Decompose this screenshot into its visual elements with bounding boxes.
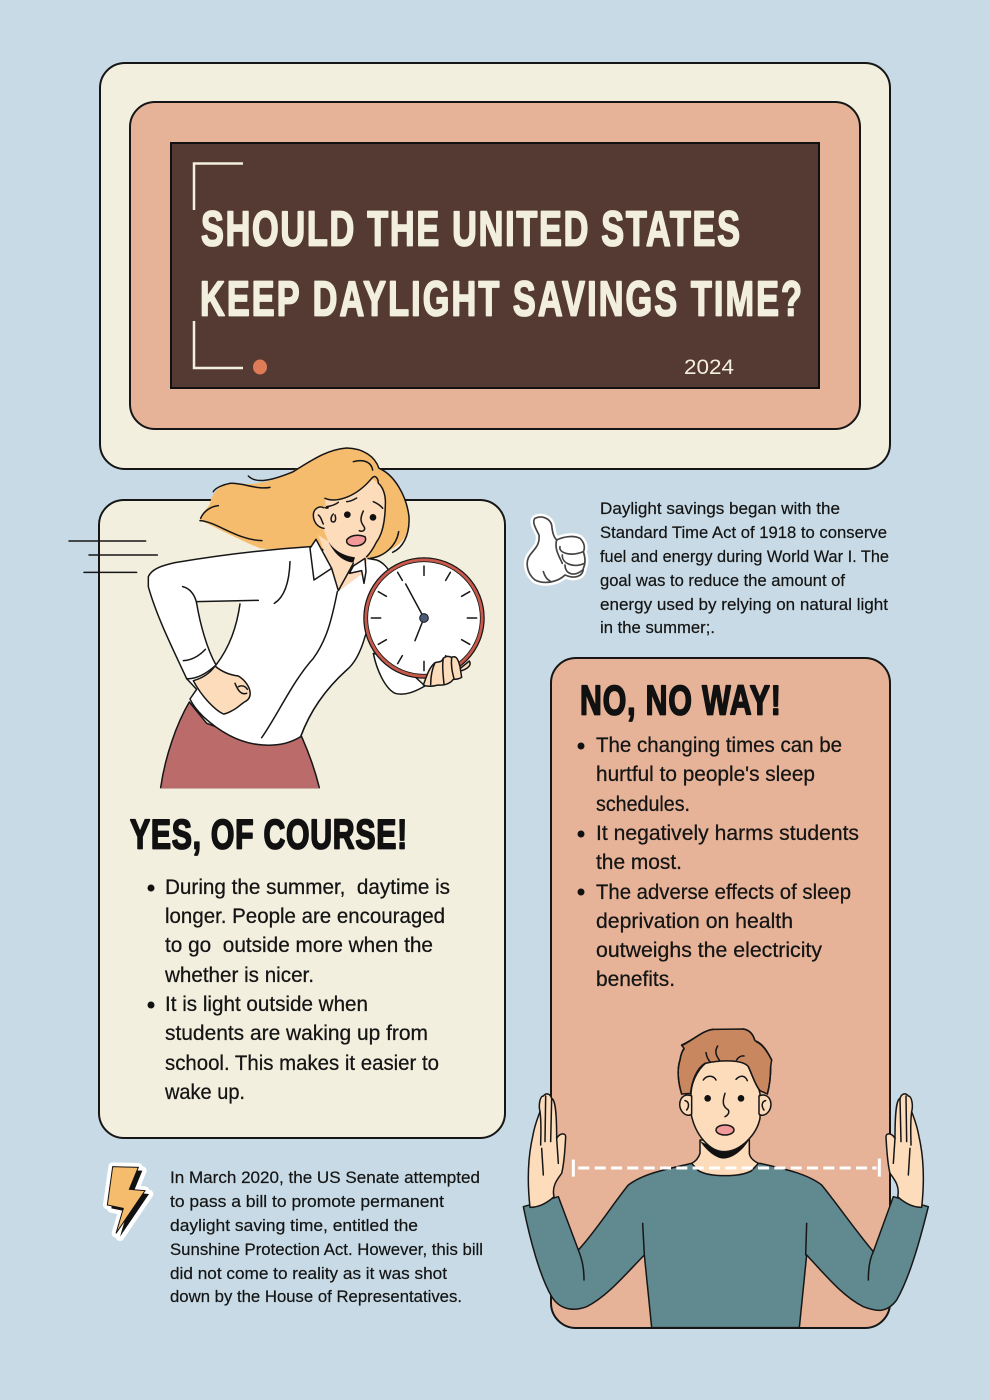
panel: yes [99, 500, 505, 1138]
text: senate note: to pass a bill to promote permanent [170, 1192, 444, 1211]
man sweater [523, 1163, 928, 1328]
list: no arguments: schedules. [596, 793, 690, 816]
list: yes arguments [148, 876, 450, 1104]
woman skirt [161, 702, 319, 788]
man hair [678, 1029, 772, 1094]
list: no arguments: deprivation on health [596, 910, 793, 933]
title [200, 201, 802, 326]
clock [364, 558, 484, 678]
text: history note: Standard Time Act of 1918 to conserve [600, 523, 887, 542]
list: yes arguments: It is light outside when [165, 993, 368, 1016]
text: senate note: Sunshine Protection Act. However, this bill [170, 1240, 483, 1259]
list: no arguments: The adverse effects of sleep [596, 881, 851, 904]
panel: no [551, 658, 890, 1328]
list: no arguments: the most. [596, 851, 682, 874]
text: senate note: did not come to reality as it was shot [170, 1264, 447, 1283]
text: history note [600, 499, 889, 637]
man ears [680, 1095, 771, 1115]
year label: 2024 [684, 356, 734, 379]
list: yes arguments: students are waking up from [165, 1022, 428, 1045]
text: senate note: down by the House of Representatives. [170, 1287, 462, 1306]
list: yes arguments: to go outside more when the [165, 934, 433, 957]
panel: title frame [100, 63, 890, 469]
list: no arguments [578, 734, 859, 991]
text: history note: energy used by relying on natural light [600, 595, 888, 614]
icon: lightning bolt [107, 1167, 149, 1237]
text: history note: fuel and energy during World War I. The [600, 547, 889, 566]
list: no arguments: outweighs the electricity [596, 939, 822, 962]
icon: thumbs up [527, 517, 585, 582]
man face [691, 1060, 760, 1152]
title: KEEP DAYLIGHT SAVINGS TIME? [200, 271, 802, 326]
list: yes arguments: wake up. [164, 1081, 245, 1104]
list: yes arguments: whether is nicer. [164, 964, 314, 987]
list: yes arguments: longer. People are encouraged [165, 905, 445, 928]
text: senate note: daylight saving time, entitled the [170, 1216, 418, 1235]
list: no arguments: It negatively harms students [596, 822, 859, 845]
text: history note: in the summer;. [600, 618, 715, 637]
woman hair [200, 449, 409, 558]
heading: yes: YES, OF COURSE! [130, 811, 407, 858]
heading: no: NO, NO WAY! [580, 677, 781, 724]
woman sleeve behind clock [373, 653, 425, 694]
list: no arguments: benefits. [596, 968, 675, 991]
list: yes arguments: school. This makes it easier to [165, 1052, 439, 1075]
woman hand on clock [423, 656, 470, 686]
woman shirt [148, 547, 388, 745]
woman fist [193, 666, 250, 714]
woman face [313, 477, 386, 559]
man facial features [703, 1076, 747, 1135]
list: yes arguments: During the summer, daytime is [165, 876, 450, 899]
woman neck [318, 535, 368, 592]
list: no arguments: The changing times can be [596, 734, 842, 757]
man left hand [528, 1094, 566, 1207]
text: history note: Daylight savings began with the [600, 499, 840, 518]
man neck [692, 1140, 758, 1176]
woman collar [310, 539, 366, 583]
man right hand [886, 1094, 923, 1207]
illustration: man raising hands [523, 1029, 928, 1328]
text: history note: goal was to reduce the amount of [600, 571, 845, 590]
illustration: woman running with clock [69, 448, 484, 788]
dashed width marker [573, 1159, 879, 1177]
list: no arguments: hurtful to people's sleep [596, 763, 815, 786]
woman arm gap [197, 602, 240, 665]
text: senate note: In March 2020, the US Senate attempted [170, 1168, 480, 1187]
text: senate note [170, 1168, 483, 1306]
title: SHOULD THE UNITED STATES [201, 201, 740, 256]
